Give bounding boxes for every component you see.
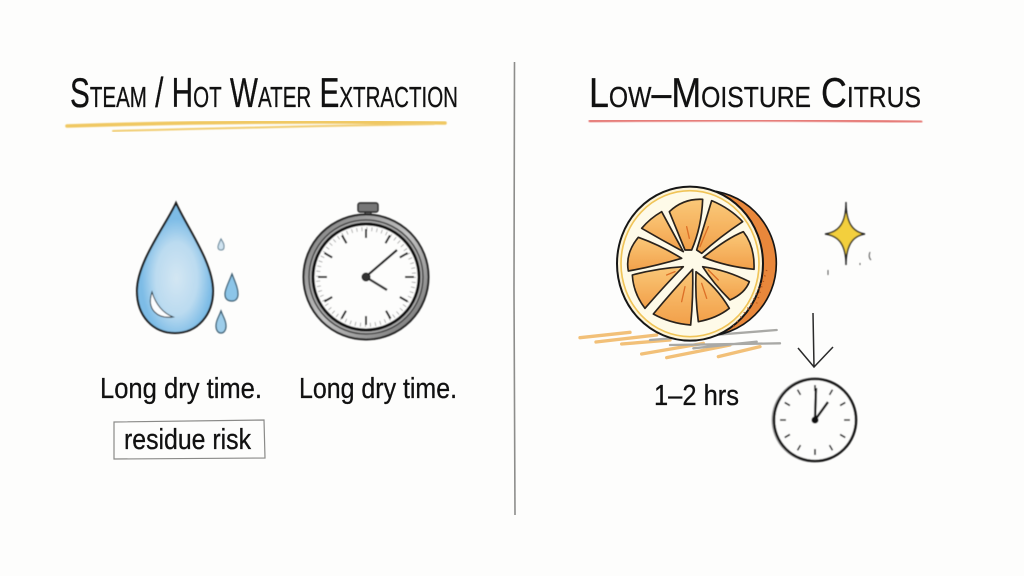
icon: stopwatch (304, 203, 428, 340)
icon: water drop (137, 203, 238, 333)
heading: low-moisture citrus: Low–Moisture Citrus (589, 69, 921, 116)
arrow: down to clock (798, 313, 833, 367)
icon: small clock (773, 379, 856, 461)
panel: low-moisture citrus (580, 69, 921, 461)
caption: long dry time, drop: Long dry time. (100, 373, 262, 405)
red heading underline (590, 120, 921, 122)
icon: sparkle (825, 202, 871, 275)
panel: steam / hot water extraction (67, 69, 458, 459)
caption: 1–2 hrs: 1–2 hrs (654, 380, 739, 412)
yellow heading underline (67, 122, 445, 131)
icon: orange slice (580, 187, 780, 358)
caption: long dry time, stopwatch: Long dry time. (299, 373, 457, 405)
divider (514, 62, 515, 515)
callout: residue risk: residue risk (124, 424, 251, 456)
heading: steam / hot water extraction: Steam / Hot Water Extraction (70, 69, 458, 116)
